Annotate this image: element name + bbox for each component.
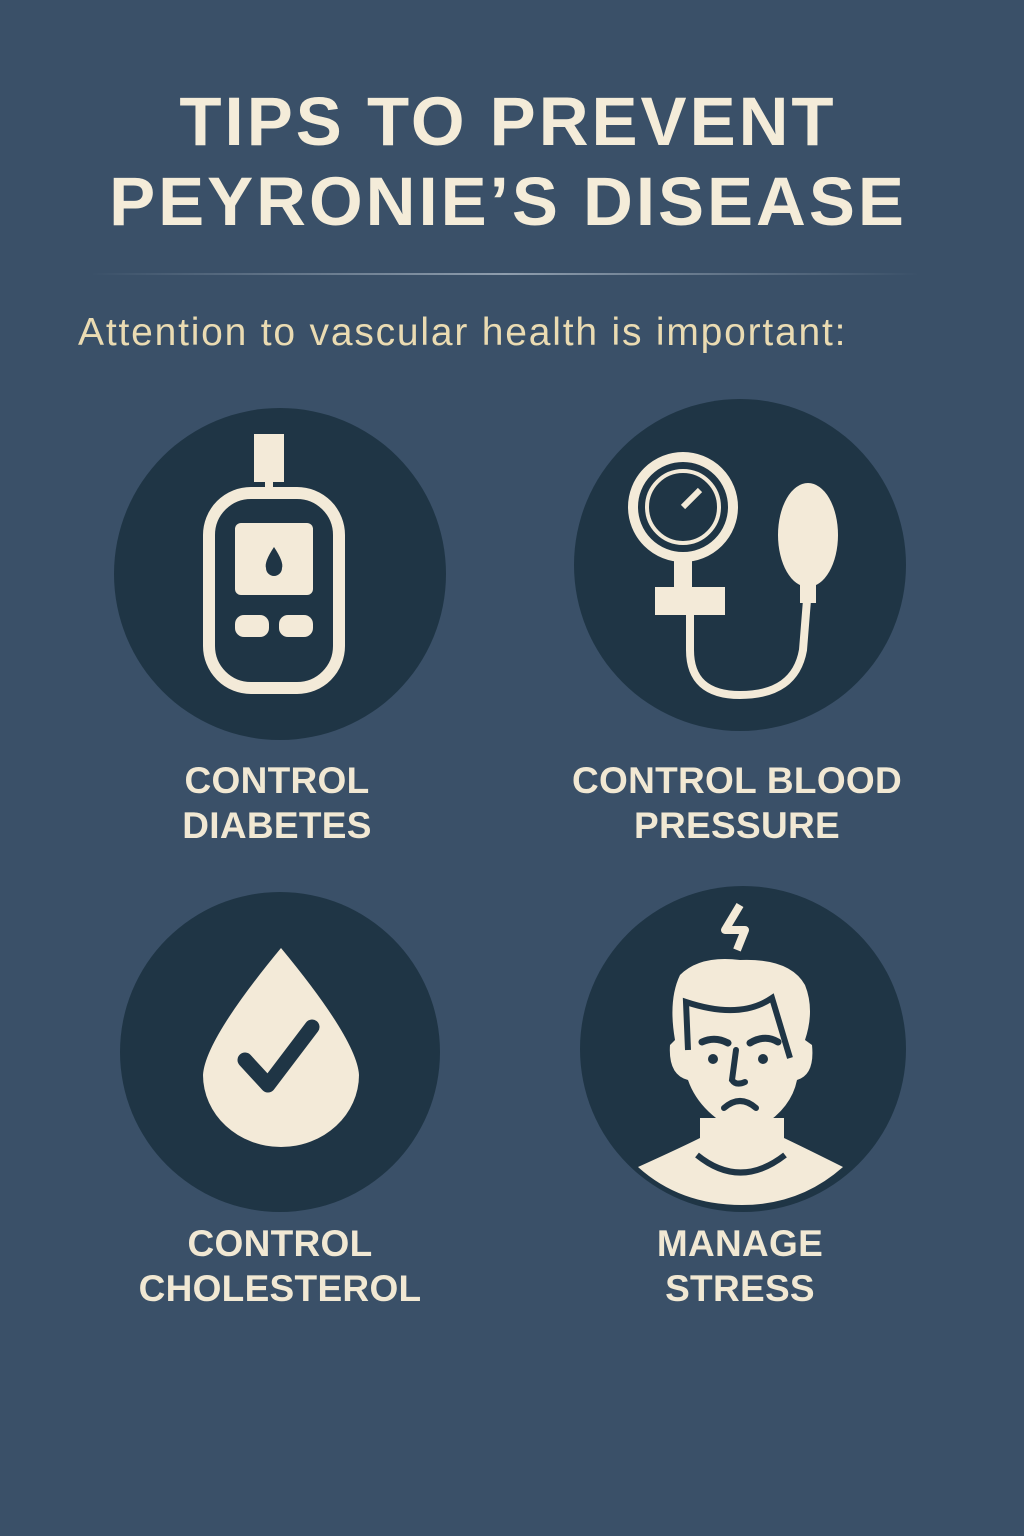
label: control diabetes: DIABETES [182,805,372,846]
label: control cholesterol: CHOLESTEROL [139,1268,421,1309]
icon: drop with check [120,892,440,1212]
label: manage stress: MANAGE [657,1223,823,1264]
icon: stressed person [580,886,906,1212]
icon: glucose meter [114,408,446,740]
label: control blood pressure: PRESSURE [634,805,840,846]
label: manage stress [657,1223,823,1309]
label: control blood pressure [572,760,902,846]
subtitle: Attention to vascular health is important: [78,311,847,354]
title: TIPS TO PREVENT [179,83,837,160]
title: PEYRONIE’S DISEASE [109,163,907,240]
icon: blood pressure gauge [574,399,906,731]
label: control blood pressure: CONTROL BLOOD [572,760,902,801]
label: control cholesterol [139,1223,421,1309]
label: control diabetes: CONTROL [184,760,370,801]
title [109,83,907,240]
label: control cholesterol: CONTROL [187,1223,373,1264]
label: control diabetes [182,760,372,846]
label: manage stress: STRESS [665,1268,815,1309]
